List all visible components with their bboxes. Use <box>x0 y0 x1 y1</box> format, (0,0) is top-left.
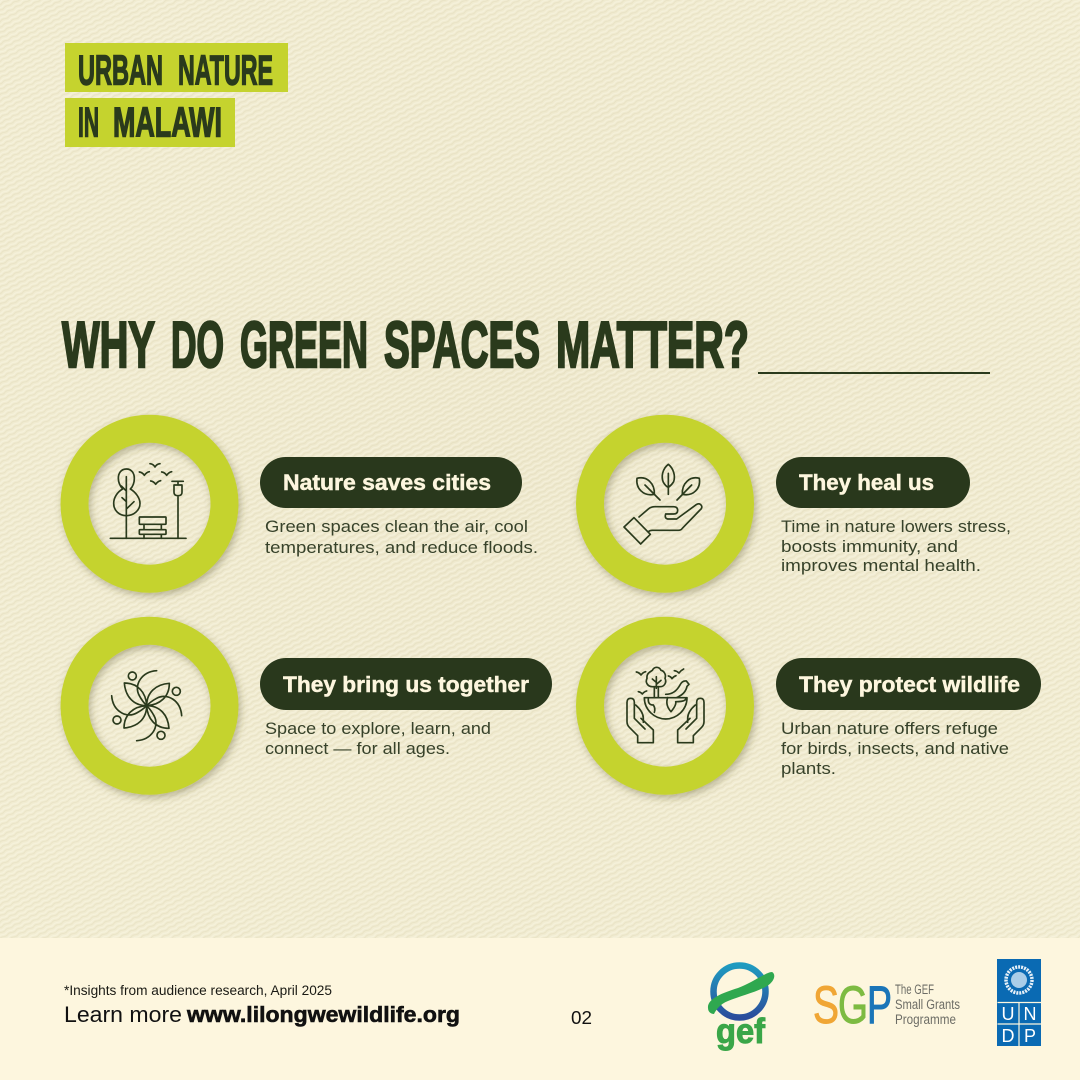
pill heading <box>776 457 970 508</box>
logo: GEF: gef <box>716 1012 765 1051</box>
main heading: MATTER? <box>556 308 749 381</box>
body text: Time in nature lowers stress, <box>781 517 1011 536</box>
panel: they heal us <box>590 429 1011 579</box>
footer band <box>0 938 1080 1080</box>
footnote: *Insights from audience research, April 2025 <box>64 983 332 998</box>
icon: hands holding globe, tree and bird <box>627 667 704 743</box>
panel: they bring us together <box>74 631 552 781</box>
logo: SGP: P <box>867 976 892 1035</box>
logo: UNDP: P <box>1024 1026 1036 1046</box>
logo: SGP: The GEF <box>895 982 934 997</box>
body text: plants. <box>781 759 836 778</box>
series tag: Urban Nature in Malawi: MALAWI <box>113 98 222 146</box>
logo: SGP: G <box>838 976 868 1035</box>
series tag: Urban Nature in Malawi: NATURE <box>178 46 273 94</box>
logo: GEF <box>708 966 774 1051</box>
main heading: SPACES <box>384 308 540 381</box>
ring: they bring us together <box>74 631 224 781</box>
logo: UNDP: U <box>1002 1004 1014 1024</box>
learn more link: Learn more <box>64 1002 182 1027</box>
pill heading: They heal us <box>799 470 934 495</box>
pill heading: Nature saves cities <box>283 470 491 495</box>
panel: nature saves cities <box>74 429 538 579</box>
pill heading: They bring us together <box>283 672 529 697</box>
logo: UNDP <box>997 959 1041 1046</box>
main heading: GREEN <box>240 308 368 381</box>
pill heading <box>776 658 1041 710</box>
pill heading: They protect wildlife <box>799 672 1020 697</box>
learn more link <box>64 1002 460 1027</box>
body text: for birds, insects, and native <box>781 739 1009 758</box>
body text <box>265 517 538 557</box>
logo: SGP: S <box>813 976 839 1035</box>
pill heading <box>260 457 522 508</box>
body text: boosts immunity, and <box>781 537 958 556</box>
body text <box>781 517 1011 575</box>
icon: hand holding leaves <box>624 464 702 544</box>
body text: Green spaces clean the air, cool <box>265 517 528 536</box>
logo: SGP: Small Grants <box>895 997 960 1012</box>
series tag: Urban Nature in Malawi: URBAN <box>78 46 163 94</box>
body text <box>781 719 1009 778</box>
main heading <box>62 308 749 381</box>
body text: Space to explore, learn, and <box>265 719 491 738</box>
body text: connect — for all ages. <box>265 739 450 758</box>
panel: they protect wildlife <box>590 631 1041 781</box>
learn more link: www.lilongwewildlife.org <box>186 1002 460 1027</box>
page number: 02 <box>571 1007 592 1028</box>
pill heading <box>260 658 552 710</box>
main heading: DO <box>171 308 224 381</box>
series tag: Urban Nature in Malawi: IN <box>78 98 99 146</box>
ring: nature saves cities <box>74 429 224 579</box>
icon: flower of people <box>112 671 182 741</box>
logo: UNDP: D <box>1002 1026 1014 1046</box>
body text <box>265 719 491 758</box>
logo: UNDP: N <box>1024 1004 1036 1024</box>
body text: temperatures, and reduce floods. <box>265 538 538 557</box>
series tag: Urban Nature in Malawi <box>65 43 288 147</box>
body text: improves mental health. <box>781 556 981 575</box>
logo: SGP <box>813 976 960 1035</box>
heading rule <box>758 372 990 374</box>
icon: tree, bench and lamp <box>110 464 186 538</box>
ring: they heal us <box>590 429 740 579</box>
logo: SGP: Programme <box>895 1012 956 1027</box>
body text: Urban nature offers refuge <box>781 719 998 738</box>
ring: they protect wildlife <box>590 631 740 781</box>
main heading: WHY <box>62 308 155 381</box>
